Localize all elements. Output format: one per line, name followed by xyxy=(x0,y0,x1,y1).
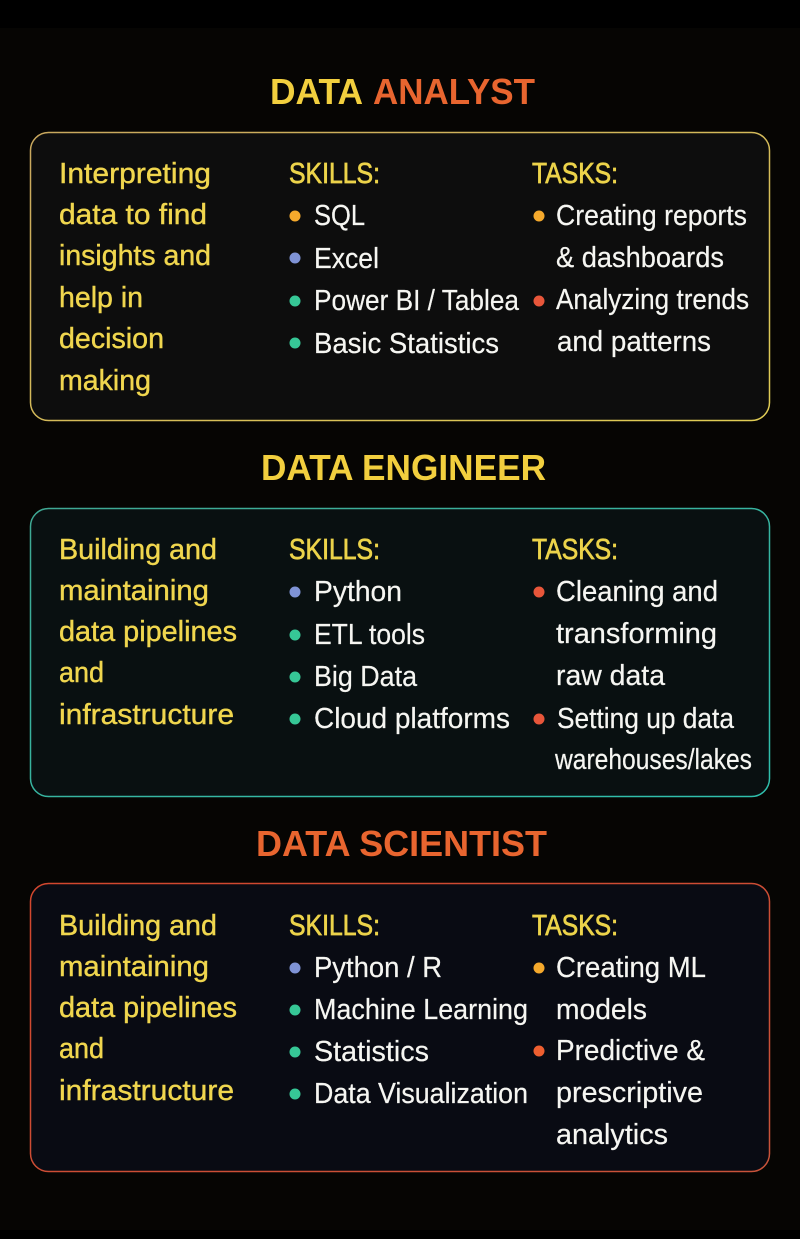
text block: analyst description: insights and xyxy=(59,240,211,272)
list: scientist tasks: analytics xyxy=(556,1119,668,1151)
text block: analyst description: making xyxy=(59,365,151,397)
list: analyst skills: SKILLS: xyxy=(289,158,380,190)
text block: scientist description: data pipelines xyxy=(59,992,237,1024)
list: scientist skills: Machine Learning xyxy=(314,994,528,1026)
text block: engineer description xyxy=(59,534,237,731)
list: scientist tasks: models xyxy=(556,994,647,1026)
list: engineer tasks: Cleaning and xyxy=(556,576,718,608)
list: engineer skills: SKILLS: xyxy=(289,534,380,566)
list: scientist tasks xyxy=(532,910,706,1151)
list: scientist skills: Statistics xyxy=(314,1036,429,1068)
list: engineer tasks: raw data xyxy=(556,660,665,692)
list: analyst skills: SQL xyxy=(314,200,365,232)
list: scientist tasks: Predictive & xyxy=(556,1035,705,1067)
text block: engineer description: data pipelines xyxy=(59,616,237,648)
text block: analyst description: help in xyxy=(59,282,143,314)
text block: scientist description: Building and xyxy=(59,910,217,942)
list: analyst tasks xyxy=(532,158,749,358)
list: analyst skills: Power BI / Tablea xyxy=(314,285,519,317)
list: engineer tasks: transforming xyxy=(556,618,717,650)
list: engineer tasks: Setting up data xyxy=(557,703,734,735)
title: data analyst: ANALYST xyxy=(373,71,535,112)
list: engineer skills: Python xyxy=(314,576,402,608)
list: scientist tasks: TASKS: xyxy=(532,910,618,942)
list: analyst skills: Basic Statistics xyxy=(314,328,499,360)
list: engineer skills: Cloud platforms xyxy=(314,703,510,735)
list: analyst skills: Excel xyxy=(314,243,379,275)
text block: analyst description xyxy=(59,158,211,397)
panel: data engineer xyxy=(30,508,770,796)
list: engineer tasks: warehouses/lakes xyxy=(554,744,752,776)
list: scientist skills xyxy=(289,910,528,1110)
list: scientist skills: SKILLS: xyxy=(289,910,380,942)
list: engineer skills: ETL tools xyxy=(314,619,425,651)
title: data analyst: DATA xyxy=(270,71,363,112)
title: data scientist: DATA SCIENTIST xyxy=(256,823,547,864)
text block: analyst description: Interpreting xyxy=(59,158,211,190)
panel: data analyst xyxy=(30,132,770,420)
title: data analyst xyxy=(270,71,535,112)
list: engineer tasks: TASKS: xyxy=(532,534,618,566)
list: scientist skills: Data Visualization xyxy=(314,1078,528,1110)
list: engineer skills: Big Data xyxy=(314,661,417,693)
text block: analyst description: data to find xyxy=(59,199,207,231)
text block: engineer description: infrastructure xyxy=(59,699,234,731)
list: analyst tasks: TASKS: xyxy=(532,158,618,190)
text block: analyst description: decision xyxy=(59,323,164,355)
list: scientist skills: Python / R xyxy=(314,952,442,984)
title: data engineer: DATA ENGINEER xyxy=(261,447,546,488)
list: analyst tasks: and patterns xyxy=(557,326,711,358)
text block: scientist description: and xyxy=(59,1033,104,1065)
text block: engineer description: Building and xyxy=(59,534,217,566)
list: scientist tasks: Creating ML xyxy=(556,952,706,984)
list: analyst tasks: Analyzing trends xyxy=(556,284,749,316)
text block: engineer description: maintaining xyxy=(59,575,209,607)
list: analyst tasks: Creating reports xyxy=(556,200,747,232)
text block: scientist description xyxy=(59,910,237,1107)
list: engineer tasks xyxy=(532,534,752,776)
text block: engineer description: and xyxy=(59,657,104,689)
list: analyst skills xyxy=(289,158,519,360)
list: analyst tasks: & dashboards xyxy=(556,242,724,274)
panel: data scientist xyxy=(30,884,770,1172)
list: scientist tasks: prescriptive xyxy=(556,1077,703,1109)
text block: scientist description: infrastructure xyxy=(59,1075,234,1107)
text block: scientist description: maintaining xyxy=(59,951,209,983)
list: engineer skills xyxy=(289,534,510,735)
